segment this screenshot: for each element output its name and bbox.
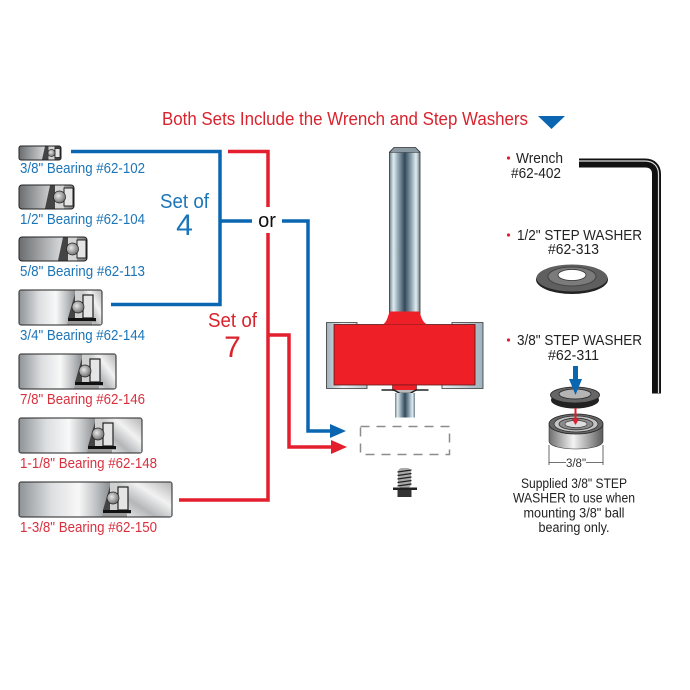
shank top chamfer [390,148,420,152]
lower red hub [392,385,416,390]
dimension 3/8: 3/8" [566,458,586,470]
bearing [549,425,603,449]
note text [513,476,635,536]
set of 4 label: 4 [176,209,193,242]
connector: blue set of 4 bracket [71,152,332,431]
wrench label: #62-402 [511,166,561,182]
bearing 1/2 [19,185,74,209]
lower stub [395,393,415,418]
connector: red set of 7 bracket [179,152,333,500]
label: 7/8 bearing: 7/8" Bearing #62-146 [20,392,145,408]
set of 4 label [160,191,209,242]
3/8 step washer label: #62-311 [548,348,599,364]
1/2 step washer label: #62-313 [548,242,599,258]
label: 3/4 bearing: 3/4" Bearing #62-144 [20,328,145,344]
set of 7 label: Set of [208,310,257,332]
set of 4 label: Set of [160,191,209,213]
dashed bearing placeholder [360,426,450,454]
bearing 1-3/8 [19,482,172,517]
icon: 1/2 step washer [536,264,608,294]
note text: bearing only. [538,520,610,536]
set of 7 label [208,310,257,364]
small washer [382,390,428,394]
1/2 step washer label: 1/2" STEP WASHER [517,228,642,244]
3/8 step washer label: 3/8" STEP WASHER [517,333,642,349]
icon: 3/8 step washer assembly [549,366,603,449]
label: 5/8 bearing: 5/8" Bearing #62-113 [20,264,145,280]
red neck [383,312,427,324]
blue arrow [573,366,578,381]
screw [393,468,417,497]
shank [390,148,420,318]
bearing 5/8 [19,237,87,261]
arrowhead: blue [330,424,346,438]
arrowhead: red [331,440,347,454]
label: 1-3/8 bearing: 1-3/8" Bearing #62-150 [20,520,157,536]
wrench label: Wrench [516,151,563,167]
1/2 step washer label [507,228,642,258]
note text: Supplied 3/8" STEP [521,476,627,492]
washer [551,392,599,408]
wrench label [507,151,563,182]
router bit [326,148,483,418]
dimension 3/8 [549,445,603,470]
sleeve [326,322,367,388]
bearing 7/8 [19,354,116,389]
bearing 3/8 [19,146,61,160]
icon: blue down triangle [538,116,565,129]
bearing 3/4 [19,290,102,325]
note text: mounting 3/8" ball [524,506,624,522]
3/8 step washer label [507,333,642,364]
or label: or [258,210,276,232]
set of 7 label: 7 [224,331,241,364]
title: Both Sets Include the Wrench and Step Washers [162,109,528,129]
note text: WASHER to use when [513,490,635,506]
red body [334,324,475,385]
bearing 1-1/8 [19,418,142,453]
label: 1/2 bearing: 1/2" Bearing #62-104 [20,212,145,228]
red arrow [574,408,576,420]
label: 3/8 bearing: 3/8" Bearing #62-102 [20,161,145,177]
wrench [579,161,658,394]
label: 1-1/8 bearing: 1-1/8" Bearing #62-148 [20,456,157,472]
